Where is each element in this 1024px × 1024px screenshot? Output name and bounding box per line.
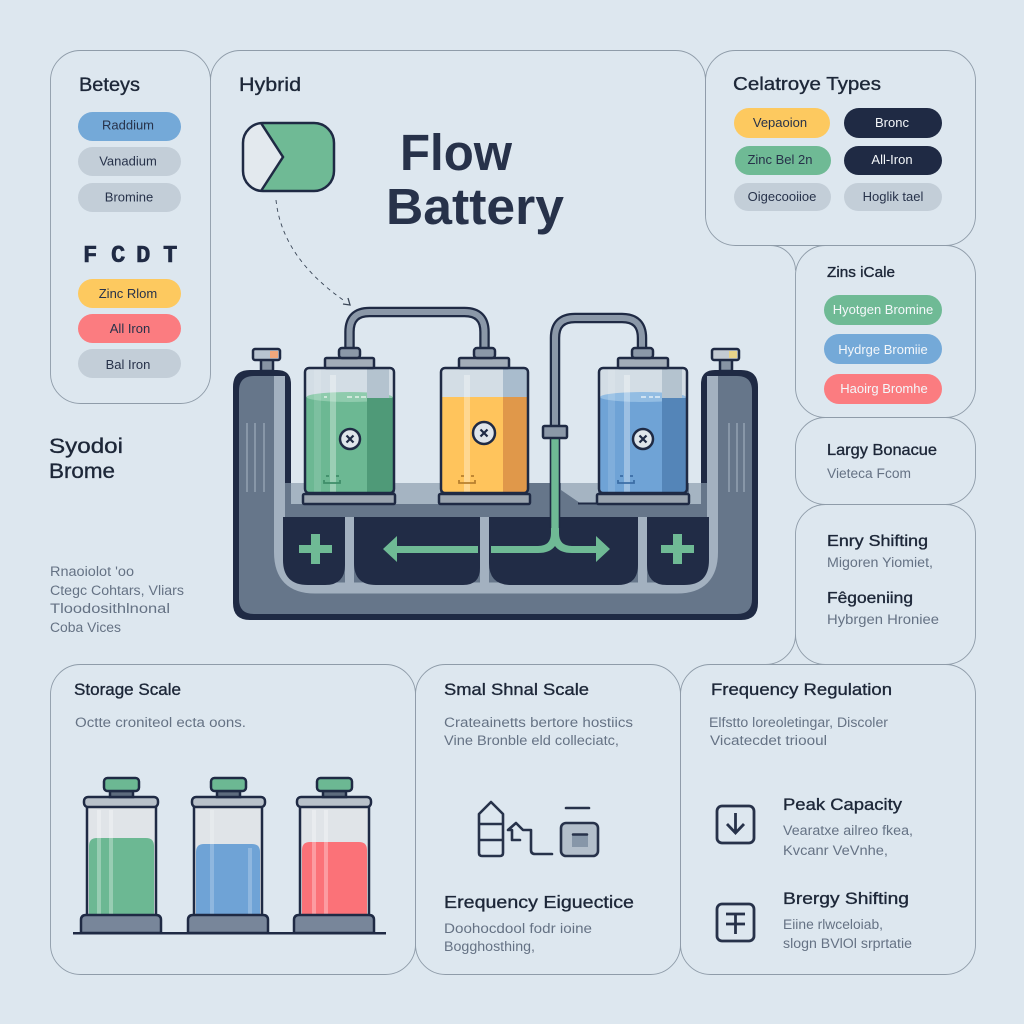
pill: Bal Iron	[78, 349, 181, 378]
green pipe edges	[550, 438, 560, 528]
terminal caps	[253, 349, 739, 371]
pill: Bronc	[844, 108, 942, 138]
pill: Haoirg Bromhe: Haoirg Bromhe	[840, 381, 928, 396]
pill: Vepadion: Vepaoion	[753, 115, 807, 130]
description: Kvcanr VeVnhe,	[783, 843, 888, 858]
heading: Enry Shifting	[827, 533, 928, 550]
pill: Vanadium	[78, 147, 181, 176]
tank: blue	[597, 348, 689, 504]
battery housing	[233, 370, 758, 620]
description	[444, 921, 592, 954]
description: Hybrgen Hroniee	[827, 612, 939, 627]
description: Vieteca Fcom	[827, 466, 911, 481]
description	[709, 715, 889, 748]
pill: Zinc Bel 2n	[735, 146, 831, 175]
panel: frequency regulation	[680, 664, 976, 974]
compartment dividers	[345, 517, 647, 589]
panel: small scale	[416, 664, 680, 974]
description: Doohocdool fodr ioine	[444, 921, 592, 936]
description: Vicatecdet triooul	[710, 733, 827, 748]
letters: F C D T: F	[83, 243, 97, 270]
heading: Smal Shnal Scale	[444, 680, 589, 699]
heading: Celatroye Types	[733, 73, 881, 94]
shelf	[291, 483, 701, 519]
panel: storage scale	[50, 664, 416, 974]
pill: Haoirg Bromhe	[824, 374, 942, 404]
text: Syodoi Brome heading: Syodoi	[49, 435, 123, 458]
heading: Fêgoeniing	[827, 590, 913, 607]
text block: left description	[50, 564, 184, 635]
pipe connector	[543, 426, 567, 438]
panel: electrolyte types	[706, 50, 976, 246]
description: slogn BVlOl srprtatie	[783, 936, 912, 951]
pill: Bronc: Bronc	[875, 115, 909, 130]
pill: Hyotgen Bromine	[824, 295, 942, 325]
pill: Bromine	[78, 183, 181, 212]
icon: down arrow box	[717, 806, 754, 843]
panel: energy shifting	[766, 504, 976, 664]
text block: left description: Rnaoiolot 'oo	[50, 564, 134, 579]
heading: Peak Capacity	[783, 795, 903, 814]
heading: Frequency Regulation	[711, 680, 892, 699]
tank pipes	[350, 312, 642, 428]
bottle: green	[81, 778, 161, 933]
description	[783, 917, 912, 951]
text block: left description: Tloodosithlnonal	[50, 601, 170, 616]
description: Elfstto loreoletingar, Discoler	[709, 715, 889, 730]
description: Crateainetts bertore hostiics	[444, 715, 633, 730]
icon: bottle, pipe and box	[479, 802, 598, 856]
letters: F C D T: D	[136, 243, 150, 270]
pill: Vepadion	[734, 108, 830, 138]
pill: Hydrge Bromiie	[824, 334, 942, 364]
compartments	[283, 517, 709, 585]
heading: Zins iCale	[827, 264, 895, 281]
description: Eiine rlwceloiab,	[783, 917, 883, 932]
icon: hybrid green chevron	[243, 123, 334, 191]
pill: Raddium: Raddium	[102, 118, 154, 132]
text block: left description: Ctegc Cohtars, Vliars	[50, 583, 184, 598]
pill: All Iron	[78, 314, 181, 343]
bottle: red	[294, 778, 374, 933]
description	[783, 823, 913, 858]
pill: Zinc Rlom	[78, 279, 181, 308]
pill: Hyotgen Bromine: Hyotgen Bromine	[833, 302, 933, 317]
housing inner light channel	[280, 376, 712, 588]
pill: Bal Iron: Bal Iron	[106, 357, 150, 372]
panel: zinc scale	[770, 246, 976, 418]
pill: Hydrge Bromiie: Hydrge Bromiie	[838, 342, 928, 357]
pill: Oigecoolioe: Oigecooiioe	[748, 189, 816, 204]
description: Vine Bronble eld colleciatc,	[444, 733, 619, 748]
plus signs	[299, 534, 694, 564]
description: Vearatxe ailreo fkea,	[783, 823, 913, 838]
title: Battery	[386, 178, 565, 235]
tank: green	[303, 348, 395, 504]
pill: All Iron: All Iron	[110, 321, 150, 336]
description: Bogghosthing,	[444, 939, 535, 954]
shelf line	[73, 932, 386, 934]
panel: batteries list	[50, 50, 210, 404]
heading: Storage Scale	[74, 680, 181, 699]
pill: Vanadium: Vanadium	[99, 154, 157, 168]
pill: Oigecoolioe	[734, 183, 831, 211]
pill: All-Iron: All-Iron	[871, 152, 913, 167]
letters: F C D T: C	[111, 243, 125, 270]
heading: Hybrid: Hybrid	[239, 75, 301, 96]
text: Syodoi Brome heading: Brome	[49, 460, 115, 483]
letters: F C D T: T	[163, 243, 177, 270]
description: Octte croniteol ecta oons.	[75, 715, 246, 730]
bottle: blue	[188, 778, 268, 933]
pill: Hoglik tael: Hoglik tael	[863, 189, 923, 204]
tank: yellow	[439, 348, 530, 504]
housing ribs	[247, 423, 744, 492]
title	[386, 124, 565, 235]
heading: Largy Bonacue	[827, 442, 937, 459]
panel: hybrid centre outline	[210, 50, 706, 216]
heading: Brergy Shifting	[783, 889, 909, 908]
text: Syodoi Brome heading	[49, 435, 123, 483]
heading: Beteys: Beteys	[79, 75, 140, 96]
pill: All-Iron	[844, 146, 942, 175]
title: Flow	[400, 124, 512, 181]
pill: Raddium	[78, 112, 181, 141]
description	[444, 715, 633, 748]
description: Migoren Yiomiet,	[827, 555, 933, 570]
pill: Hoglik tael	[844, 183, 942, 211]
heading: Erequency Eiguectice	[444, 892, 634, 912]
letters: F C D T	[83, 243, 177, 270]
pill: Zinc Bel 2n: Zinc Bel 2n	[747, 152, 813, 167]
main battery diagram	[233, 312, 758, 620]
arrow: dashed curve to tank	[276, 200, 350, 305]
pill: Bromine: Bromine	[105, 190, 153, 204]
flow arrows and green pipe	[383, 438, 610, 562]
panel: large storage	[796, 418, 976, 504]
icon: shift box	[717, 904, 754, 941]
pill: Zinc Rlom: Zinc Rlom	[99, 286, 157, 301]
text block: left description: Coba Vices	[50, 620, 121, 635]
